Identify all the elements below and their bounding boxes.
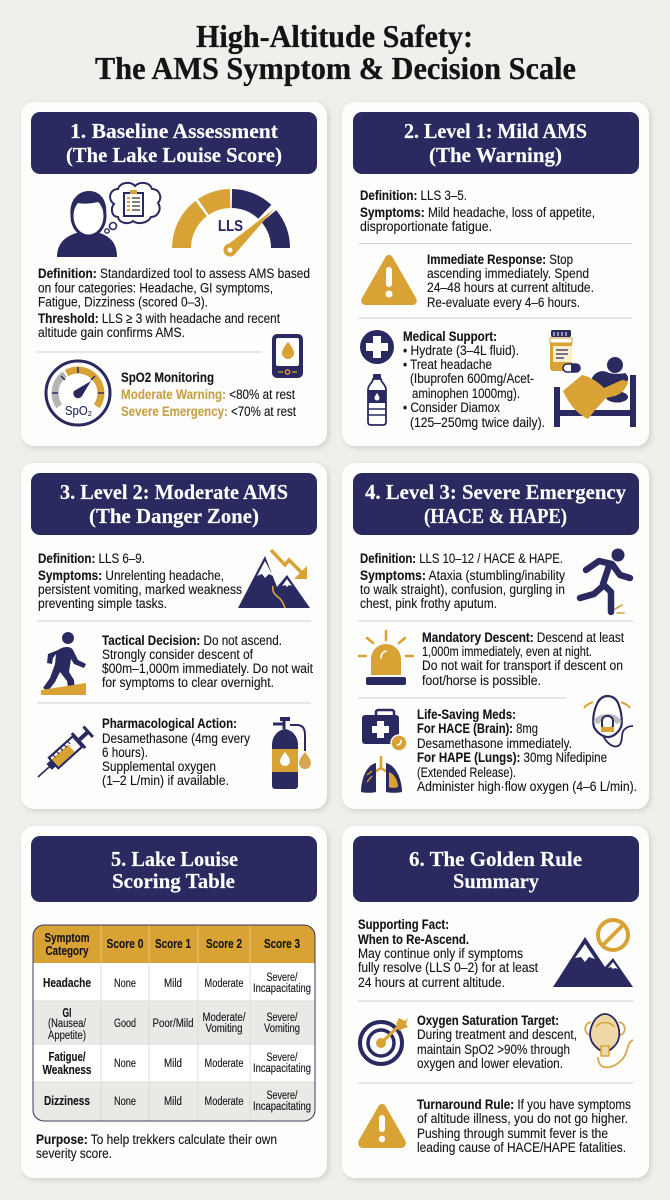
text: life-saving meds: Administer high·flow oxygen (4–6 L/min). — [417, 779, 637, 795]
text: medical support: (Ibuprofen 600mg/Acet- — [410, 371, 534, 387]
text: definition and threshold: altitude gain confirms AMS. — [38, 325, 185, 341]
text: oxygen saturation target: Oxygen Saturation Target: — [417, 1013, 559, 1029]
text: immediate response: Re-evaluate every 4–6 hours. — [427, 295, 580, 311]
text: mandatory descent: Do not wait for transport if descent on — [422, 658, 623, 674]
heading: level 1 — [353, 112, 639, 174]
text: mandatory descent — [422, 630, 624, 689]
text: turnaround rule: Turnaround Rule: If you have symptoms — [417, 1097, 631, 1113]
table: LLS scoring: Score 2 — [206, 937, 242, 951]
heading: golden rule: 6. The Golden Rule — [409, 847, 582, 871]
text: definition and symptoms — [38, 551, 242, 612]
text: tactical decision — [102, 633, 313, 691]
table: LLS scoring: (Nausea/ — [48, 1018, 87, 1030]
text: life-saving meds: For HAPE (Lungs): 30mg Nifedipine — [417, 750, 607, 766]
text: definition and symptoms — [360, 551, 566, 612]
text: SpO2 monitoring: SpO2 Monitoring — [121, 370, 214, 386]
text: pharmacological action: Supplemental oxygen — [102, 759, 216, 775]
text: purpose: Purpose: To help trekkers calculate their own — [36, 1132, 277, 1148]
panel: 1 baseline assessment — [21, 102, 327, 446]
text: supporting fact: fully resolve (LLS 0–2) for at least — [358, 960, 538, 976]
table: LLS scoring: Incapacitating — [253, 1063, 311, 1075]
table: LLS scoring: Vomiting — [206, 1023, 242, 1035]
table: LLS scoring: Severe/ — [266, 1012, 298, 1024]
table: LLS scoring: Mild — [164, 1096, 182, 1108]
text: supporting fact: May continue only if symptoms — [358, 946, 523, 962]
text: supporting fact: When to Re-Ascend. — [358, 932, 469, 948]
text: definition and symptoms: chest, pink frothy aputum. — [360, 596, 497, 612]
icon: person thinking of clipboard — [57, 183, 160, 257]
text: definition and symptoms: Definition: LLS 6–9. — [38, 551, 145, 567]
text: tactical decision: Strongly consider descent of — [102, 647, 253, 663]
icon: LLS gauge: LLS — [218, 218, 243, 235]
text: definition and symptoms: disproportionate fatigue. — [360, 219, 492, 235]
table: LLS scoring: Moderate — [204, 1058, 244, 1070]
text: purpose: severity score. — [36, 1146, 112, 1162]
title: High-Altitude Safety: — [196, 18, 473, 54]
icon: patient in bed — [554, 357, 636, 427]
text: definition and symptoms: Definition: LLS 10–12 / HACE & HAPE. — [360, 551, 563, 567]
icon: medical cross — [360, 330, 394, 364]
icon: pulse oximeter — [272, 334, 303, 378]
text: medical support: aminophen 1000mg). — [412, 386, 520, 402]
table: LLS scoring: Weakness — [42, 1063, 92, 1077]
table: LLS scoring: Vomiting — [264, 1023, 300, 1035]
heading: level 2: 3. Level 2: Moderate AMS — [60, 480, 288, 504]
icon: stumbling person — [580, 548, 630, 613]
text: medical support: • Treat headache — [403, 357, 492, 373]
text: turnaround rule: Pushing through summit fever is the — [417, 1126, 608, 1142]
text: definition and threshold: Fatigue, Dizziness (scored 0–3). — [38, 295, 208, 311]
table: LLS scoring: None — [114, 1058, 136, 1070]
icon: gold oxygen mask — [585, 1014, 633, 1067]
icon: pill bottle and capsule — [550, 330, 580, 372]
text: definition and symptoms: Symptoms: Unrelenting headache, — [38, 568, 224, 584]
icon: lungs — [361, 756, 402, 793]
icon: oxygen mask — [584, 696, 633, 746]
table: LLS scoring: Mild — [164, 1058, 182, 1070]
text: pharmacological action: Pharmacological Action: — [102, 716, 237, 732]
text: tactical decision: for symptoms to clear overnight. — [102, 675, 274, 691]
text: oxygen saturation target — [417, 1013, 577, 1072]
text: definition and threshold — [38, 266, 310, 341]
text: life-saving meds — [417, 707, 637, 795]
panel: 3 level 2 moderate AMS — [21, 463, 327, 809]
text: pharmacological action — [102, 716, 251, 789]
text: SpO2 monitoring — [121, 370, 296, 420]
heading: baseline assessment: 1. Baseline Assessment — [70, 119, 279, 143]
text: tactical decision: $00m–1,000m immediately. Do not wait — [102, 661, 313, 677]
title — [95, 18, 576, 86]
icon: medical kit — [362, 710, 407, 751]
table: LLS scoring: Score 3 — [264, 937, 300, 951]
text: medical support — [403, 329, 545, 431]
icon: water bottle — [368, 374, 386, 425]
heading: golden rule — [353, 836, 639, 902]
heading: level 1: (The Warning) — [429, 143, 562, 167]
table: LLS scoring: Category — [46, 944, 89, 958]
table: LLS scoring: GI — [62, 1006, 72, 1020]
text: immediate response: ascending immediately. Spend — [427, 266, 589, 282]
heading: level 2: (The Danger Zone) — [89, 504, 259, 528]
text: definition and symptoms: Symptoms: Ataxia (stumbling/inability — [360, 568, 566, 584]
text: supporting fact: 24 hours at current altitude. — [358, 975, 505, 991]
text: pharmacological action: Desamethasone (4mg every — [102, 731, 251, 747]
text: pharmacological action: (1–2 L/min) if available. — [102, 773, 229, 789]
table: LLS scoring: Incapacitating — [253, 983, 311, 995]
table: LLS scoring: Score 1 — [155, 937, 191, 951]
text: definition and symptoms: persistent vomiting, marked weakness — [38, 582, 242, 598]
text: life-saving meds: Desamethasone immediately. — [417, 736, 572, 752]
table: LLS scoring: Symptom — [44, 931, 90, 945]
icon: SpO2 dial: SpO₂ — [65, 404, 92, 418]
text: oxygen saturation target: During treatment and descent, — [417, 1027, 577, 1043]
panel: 5 Lake Louise scoring table — [21, 826, 327, 1178]
text: definition and threshold: on four categories: Headache, GI symptoms, — [38, 280, 273, 296]
text: definition and symptoms: Definition: LLS 3–5. — [360, 188, 467, 204]
table: LLS scoring: None — [114, 1096, 136, 1108]
table: LLS scoring: Mild — [164, 978, 182, 990]
icon: LLS gauge — [182, 198, 280, 256]
heading: scoring table — [31, 836, 317, 902]
heading: scoring table: 5. Lake Louise — [111, 847, 238, 871]
text: life-saving meds: (Extended Release). — [417, 765, 516, 781]
text: medical support: • Hydrate (3–4L fluid). — [403, 343, 519, 359]
icon: target with arrow — [360, 1018, 408, 1064]
table: LLS scoring: Poor/Mild — [152, 1018, 194, 1030]
heading: level 3: 4. Level 3: Severe Emergency — [365, 480, 626, 504]
text: supporting fact — [358, 917, 538, 991]
table: LLS scoring: Moderate/ — [202, 1012, 246, 1024]
table: LLS scoring: Fatigue/ — [48, 1050, 86, 1064]
panel: 2 level 1 mild AMS — [342, 102, 649, 446]
icon: SpO2 dial — [46, 361, 110, 425]
heading: level 3 — [353, 473, 639, 535]
icon: oxygen tank — [272, 717, 311, 789]
table: LLS scoring: Score 0 — [106, 937, 144, 951]
text: immediate response — [427, 252, 594, 311]
text: SpO2 monitoring: Moderate Warning: <80% at rest — [121, 387, 295, 403]
title: The AMS Symptom & Decision Scale — [95, 50, 576, 86]
text: SpO2 monitoring: Severe Emergency: <70% at rest — [121, 404, 296, 420]
heading: level 3: (HACE & HAPE) — [424, 504, 567, 528]
text: purpose — [36, 1132, 277, 1162]
heading: golden rule: Summary — [453, 869, 539, 893]
text: medical support: Medical Support: — [403, 329, 497, 345]
heading: baseline assessment: (The Lake Louise Score) — [66, 143, 282, 167]
text: turnaround rule: leading cause of HACE/HAPE fatalities. — [417, 1140, 626, 1156]
table: LLS scoring: Good — [114, 1018, 136, 1030]
text: mandatory descent: Mandatory Descent: Descend at least — [422, 630, 624, 646]
table: LLS scoring — [33, 925, 315, 1121]
icon: walking person — [41, 632, 86, 695]
text: pharmacological action: 6 hours). — [102, 745, 148, 761]
table: LLS scoring: Dizziness — [44, 1094, 90, 1108]
table: LLS scoring: Severe/ — [266, 1052, 298, 1064]
heading: scoring table: Scoring Table — [112, 869, 235, 893]
text: mandatory descent: foot/horse is possible. — [422, 673, 541, 689]
text: oxygen saturation target: oxygen and lower elevation. — [417, 1056, 563, 1072]
icon: emergency beacon — [359, 631, 413, 685]
table: LLS scoring: Appetite) — [48, 1030, 86, 1042]
heading: level 1: 2. Level 1: Mild AMS — [404, 119, 587, 143]
text: immediate response: 24–48 hours at current altitude. — [427, 280, 594, 296]
text: oxygen saturation target: maintain SpO2 >90% through — [417, 1042, 570, 1058]
panel: 6 golden rule summary — [342, 826, 649, 1178]
table: LLS scoring: Incapacitating — [253, 1101, 311, 1113]
text: supporting fact: Supporting Fact: — [358, 917, 449, 933]
text: definition and threshold: Definition: Standardized tool to assess AMS based — [38, 266, 310, 282]
text: life-saving meds: For HACE (Brain): 8mg — [417, 721, 538, 737]
text: medical support: (125–250mg twice daily). — [410, 415, 545, 431]
text: medical support: • Consider Diamox — [403, 400, 500, 416]
heading: baseline assessment — [31, 112, 317, 174]
text: turnaround rule: of altitude illness, you do not go higher. — [417, 1111, 628, 1127]
table: LLS scoring: Moderate — [204, 978, 244, 990]
text: tactical decision: Tactical Decision: Do not ascend. — [102, 633, 282, 649]
text: definition and threshold: Threshold: LLS ≥ 3 with headache and recent — [38, 311, 280, 327]
table: LLS scoring: Severe/ — [266, 972, 298, 984]
heading: level 2 — [31, 473, 317, 535]
icon: warning triangle — [358, 1104, 406, 1148]
text: mandatory descent: 1,000m immediately, even at night. — [422, 644, 592, 660]
text: life-saving meds: Life-Saving Meds: — [417, 707, 516, 723]
text: immediate response: Immediate Response: Stop — [427, 252, 573, 268]
text: definition and symptoms: Symptoms: Mild headache, loss of appetite, — [360, 205, 595, 221]
text: definition and symptoms: preventing simple tasks. — [38, 596, 167, 612]
table: LLS scoring: Moderate — [204, 1096, 244, 1108]
table: LLS scoring: Severe/ — [266, 1090, 298, 1102]
icon: warning triangle — [361, 255, 417, 305]
table: LLS scoring: Headache — [43, 976, 91, 990]
text: turnaround rule — [417, 1097, 631, 1156]
panel: 4 level 3 severe emergency — [342, 463, 649, 809]
text: definition and symptoms — [360, 188, 595, 235]
icon: mountain with descent arrow — [238, 550, 310, 608]
icon: syringe — [31, 723, 96, 784]
table: LLS scoring: None — [114, 978, 136, 990]
text: definition and symptoms: to walk straight), confusion, gurgling in — [360, 582, 565, 598]
icon: mountain with prohibition sign — [553, 920, 633, 987]
